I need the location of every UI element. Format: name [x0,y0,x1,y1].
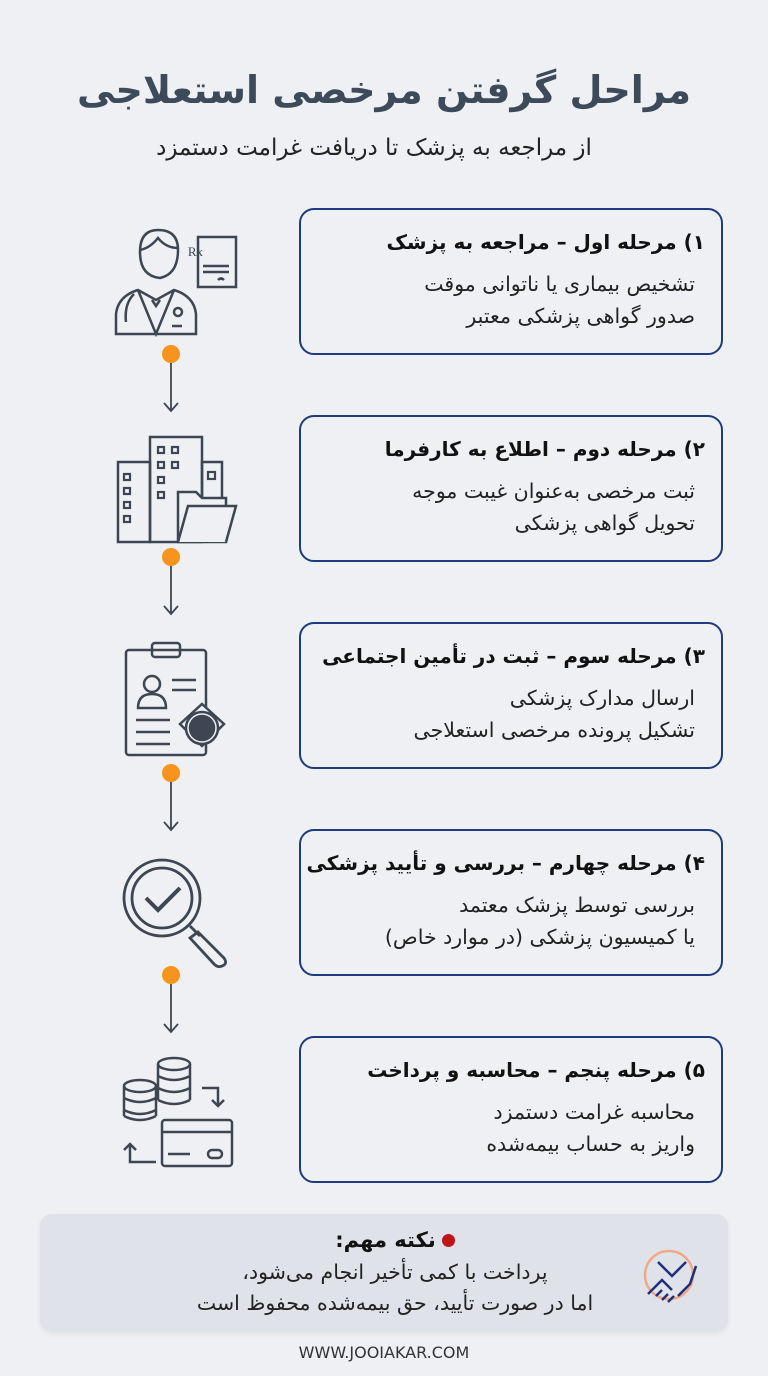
icon: building [116,436,238,544]
card 5: محاسبه غرامت دستمزد [494,1100,695,1124]
card 1: صدور گواهی پزشکی معتبر [466,304,695,328]
card 1: تشخیص بیماری یا ناتوانی موقت [424,272,695,296]
icon: doctor [114,228,238,338]
title: مراحل گرفتن مرخصی استعلاجی [77,68,691,112]
connector 1 [162,345,180,412]
note panel [40,1214,728,1332]
card 5: واریز به حساب بیمه‌شده [486,1132,695,1156]
card 2: ۲) مرحله دوم – اطلاع به کارفرما [385,437,705,461]
card 5: ۵) مرحله پنجم – محاسبه و پرداخت [367,1058,705,1082]
note text: پرداخت با کمی تأخیر انجام می‌شود، [242,1260,548,1284]
icon: coins and card [122,1056,234,1168]
connector 4 [162,966,180,1034]
icon: magnifier check [122,858,227,968]
card 4: ۴) مرحله چهارم – بررسی و تأیید پزشکی [307,851,705,875]
card 4 [299,829,723,976]
icon: handshake [644,1250,698,1303]
note text [197,1228,593,1315]
subtitle: از مراجعه به پزشک تا دریافت غرامت دستمزد [156,135,592,161]
connector 2 [162,548,180,616]
card 1 [299,208,723,355]
card 2: تحویل گواهی پزشکی [515,511,695,535]
icon: clipboard with insurance badge [124,642,226,756]
card 4: یا کمیسیون پزشکی (در موارد خاص) [385,925,695,949]
card 1: ۱) مرحله اول – مراجعه به پزشک [386,230,705,254]
card 5 [299,1036,723,1183]
card 2 [299,415,723,562]
card 3: تشکیل پرونده مرخصی استعلاجی [414,718,695,742]
icon: doctor: Rx [188,244,203,259]
note text: اما در صورت تأیید، حق بیمه‌شده محفوظ است [197,1291,593,1315]
note text: نکته مهم: [335,1228,436,1252]
card 2: ثبت مرخصی به‌عنوان غیبت موجه [412,479,695,503]
card 4: بررسی توسط پزشک معتمد [459,893,695,917]
card 3 [299,622,723,769]
card 3: ۳) مرحله سوم – ثبت در تأمین اجتماعی [322,644,705,668]
connector 3 [162,764,180,832]
card 3: ارسال مدارک پزشکی [510,686,695,710]
website: WWW.JOOIAKAR.COM [299,1343,469,1362]
